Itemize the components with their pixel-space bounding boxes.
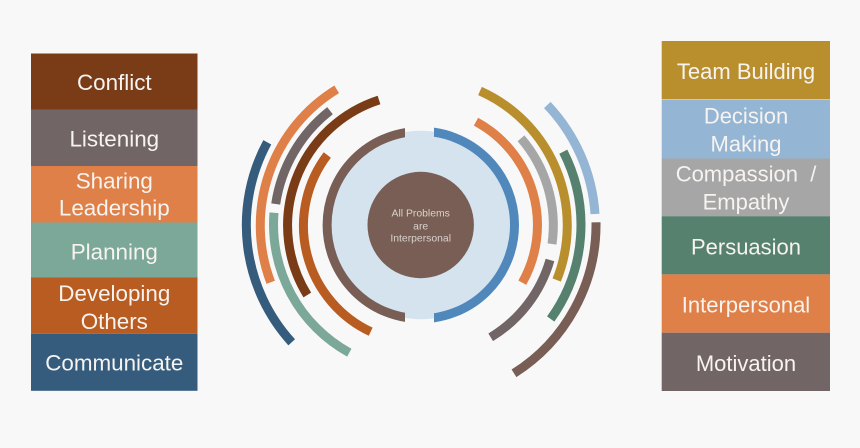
tile: Decision Making: Decision [704,103,788,128]
tile: Conflict: Conflict [77,70,152,95]
tile: Listening: Listening [69,127,159,152]
tile: Compassion / Empathy: Empathy [703,189,789,214]
light blue disc [327,131,515,319]
tile: Conflict [31,54,198,110]
center text: All Problems [392,209,450,220]
tile: Developing Others: Developing [58,281,170,306]
tile: Sharing Leadership: Sharing [76,168,153,194]
arc: Team Building [480,91,567,280]
panel: left skills [31,54,198,391]
tile: Team Building: Team Building [677,59,815,84]
center text: Interpersonal [390,234,451,245]
arc: Conflict [288,100,379,295]
tile: Compassion / Empathy: Compassion / [676,162,817,187]
tile: Persuasion: Persuasion [691,234,801,259]
inner ring: brown left half [322,128,405,322]
diagram: concentric arcs [246,89,596,373]
tile: Interpersonal: Interpersonal [682,293,810,318]
inner ring: blue right half [434,128,519,322]
arc: Planning [274,213,349,353]
arc: Compassion / Empathy [521,138,553,244]
center text [390,209,451,245]
tile: Interpersonal [662,274,830,333]
tile: Planning [31,222,198,278]
arc: Communicate [246,142,292,342]
center text: are [413,221,428,232]
arc: Listening [276,111,330,204]
tile: Compassion / Empathy [662,158,830,216]
tile: Motivation: Motivation [696,351,796,376]
tile: Persuasion [662,216,830,274]
tile: Decision Making [662,100,830,158]
arc: Decision Making [547,105,595,214]
tile: Team Building [662,41,830,99]
tile: Listening [31,110,198,166]
tile: Communicate [31,334,198,391]
tile: Sharing Leadership [31,166,198,222]
tile: Communicate: Communicate [45,350,183,375]
tile: Motivation [662,333,830,391]
panel: right skills [662,41,830,391]
arc: outer brown [514,222,596,373]
arc: Persuasion [551,152,581,319]
tile: Decision Making: Making [711,132,781,157]
tile: Sharing Leadership: Leadership [59,196,170,220]
tile: Developing Others: Others [81,309,148,334]
arc: Sharing Leadership [260,89,337,282]
tile: Developing Others [31,278,198,334]
center circle [368,172,474,278]
tile: Planning: Planning [71,239,158,264]
arc: Developing Others [303,155,371,332]
arc: Interpersonal [476,122,537,283]
arc: Motivation (grey) [491,260,550,337]
